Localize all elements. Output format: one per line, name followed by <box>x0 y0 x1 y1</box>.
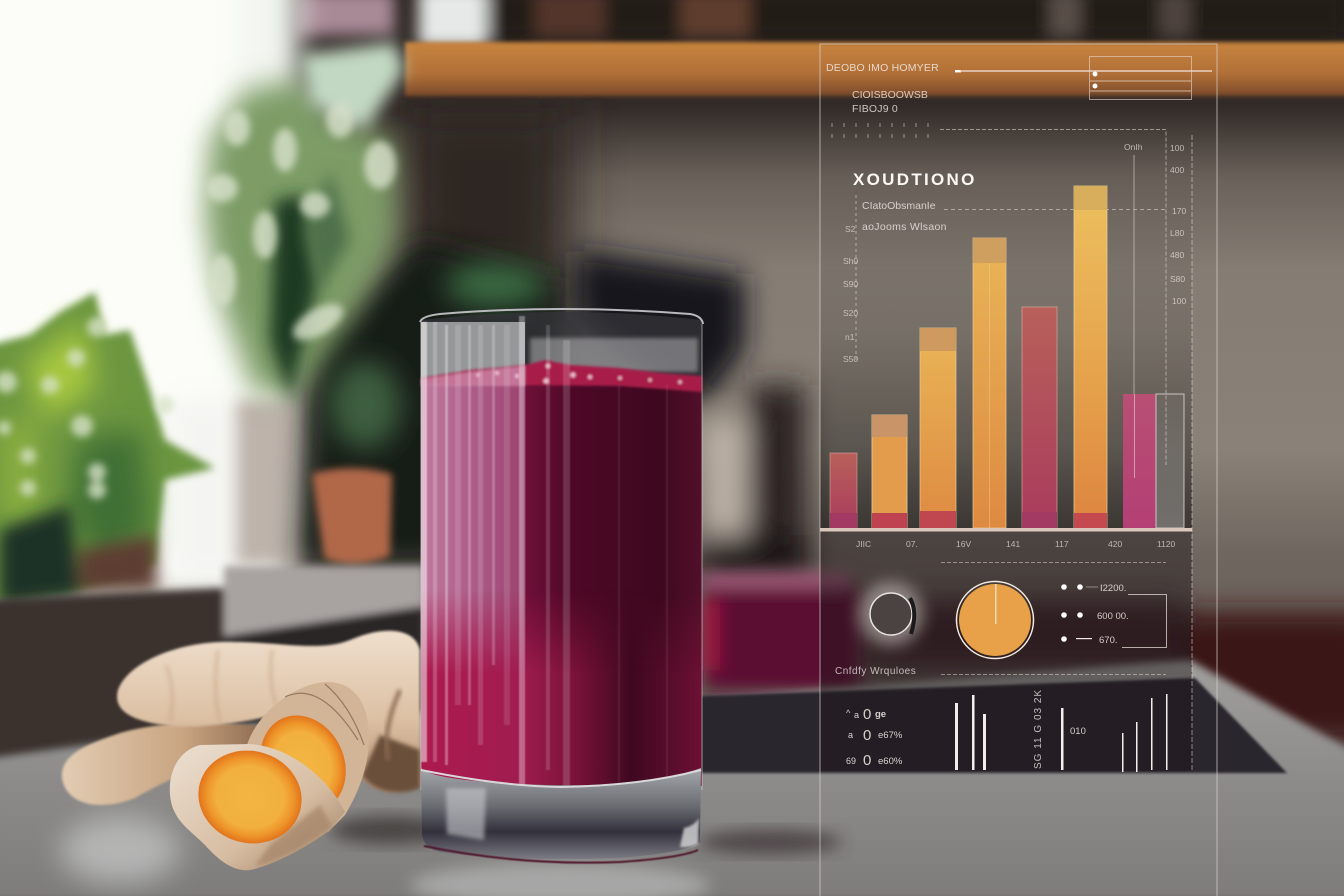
dark red pot <box>700 572 860 690</box>
x axis <box>820 528 1192 532</box>
right axis labels: 170 <box>1172 206 1186 216</box>
header subtitle: CIOISBOOWSB <box>852 89 928 101</box>
x axis labels: JIIC <box>856 539 871 549</box>
chart subtitle: CIatoObsmanIe <box>862 200 936 212</box>
right axis labels: 100 <box>1172 296 1186 306</box>
left axis labels: S2 <box>845 224 856 234</box>
x axis labels: 07. <box>906 539 918 549</box>
rotated label: SG 11 G 03 2K <box>1033 689 1044 769</box>
right axis labels: S80 <box>1170 274 1185 284</box>
back root <box>62 723 262 805</box>
right axis labels: 480 <box>1170 250 1184 260</box>
glass data panel <box>820 44 1217 896</box>
stats list: ^ <box>846 708 851 718</box>
panel header <box>826 56 1212 100</box>
counter surface <box>0 660 1344 896</box>
dark plant and terracotta pot <box>329 263 545 449</box>
glass upper wall <box>421 312 702 385</box>
x axis labels <box>856 539 1176 549</box>
lower vertical bars <box>955 694 1168 772</box>
x axis labels: 1120 <box>1157 539 1176 549</box>
left axis labels: n1 <box>845 332 855 342</box>
juice foam <box>421 360 702 392</box>
right axis labels: 400 <box>1170 165 1184 175</box>
bright window <box>0 0 300 600</box>
glass rim <box>420 309 703 324</box>
glass of beet juice <box>420 309 703 863</box>
left axis labels <box>843 224 858 364</box>
turmeric cut face, front <box>188 739 312 855</box>
glass shadow on counter <box>698 830 842 854</box>
bar 4 <box>973 238 1006 528</box>
glass base <box>421 768 701 859</box>
x axis labels: 420 <box>1108 539 1122 549</box>
header subtitle: FIBOJ9 0 <box>852 103 898 115</box>
stats list: e67% <box>878 730 903 741</box>
left axis labels: S90 <box>843 279 858 289</box>
juice body <box>421 378 702 786</box>
white planter <box>236 400 300 565</box>
stats list: 0 <box>863 727 871 744</box>
chart subtitle: aoJooms Wlsaon <box>862 221 947 233</box>
stats list: 69 <box>846 756 856 766</box>
bar 3 <box>920 328 956 528</box>
shelf objects <box>295 0 1344 48</box>
left axis labels: S50 <box>843 354 858 364</box>
chart subtitle <box>862 200 947 233</box>
right axis labels: 100 <box>1170 143 1184 153</box>
stats list: 0 <box>863 752 871 769</box>
chart guide lines <box>856 130 1192 770</box>
pie legend: 600 00. <box>1097 611 1129 622</box>
pie legend <box>1061 583 1166 648</box>
turmeric root cluster <box>62 631 420 870</box>
stats list: a <box>848 730 853 740</box>
left foreground plant <box>0 292 215 605</box>
bar 5 <box>1022 307 1057 528</box>
upper root <box>117 631 420 792</box>
pie legend: 670. <box>1099 635 1118 646</box>
right axis labels: OnIh <box>1124 142 1143 152</box>
bar 1 <box>830 453 857 528</box>
chart title: XOUDTIONO <box>853 170 977 189</box>
section divider top <box>941 562 1166 674</box>
dark shelf recess <box>400 100 570 340</box>
dot grid <box>832 123 928 138</box>
icon: small ring gauge <box>859 582 923 646</box>
dark backdrop behind plants <box>300 240 560 565</box>
pie legend: I2200. <box>1100 583 1126 594</box>
right axis labels <box>1124 142 1186 306</box>
left axis labels: Sh0 <box>843 256 858 266</box>
stats list: 0 <box>863 706 871 723</box>
blender silhouette <box>575 250 810 580</box>
cut root, back piece <box>247 682 369 832</box>
stats list: ge <box>875 709 886 720</box>
stats list: a <box>854 710 859 720</box>
bar 7 <box>1123 394 1184 528</box>
hanging plant <box>205 42 405 400</box>
wooden shelf <box>405 42 1344 96</box>
header subtitle <box>852 89 928 115</box>
bar chart <box>820 186 1192 532</box>
panel header: DEOBO IMO HOMYER <box>826 62 939 74</box>
stats list: e60% <box>878 756 903 767</box>
left axis labels: S20 <box>843 308 858 318</box>
bar 2 <box>872 415 907 528</box>
stats list <box>846 706 903 769</box>
x axis labels: 16V <box>956 539 971 549</box>
x axis labels: 117 <box>1055 539 1069 549</box>
cut root, front piece <box>170 744 345 870</box>
turmeric cut face, back <box>245 701 361 827</box>
vertical glass reflections <box>421 316 668 830</box>
x axis labels: 141 <box>1006 539 1020 549</box>
dark cooktop <box>700 678 1287 773</box>
dark ledge and grey step <box>0 566 424 770</box>
pie chart <box>956 582 1034 658</box>
right axis labels: L80 <box>1170 228 1184 238</box>
bar 6 <box>1074 186 1107 528</box>
dark red lower wall <box>860 600 1344 742</box>
small value label: 010 <box>1070 726 1086 737</box>
section label: Cnfdfy Wrquloes <box>835 666 916 677</box>
